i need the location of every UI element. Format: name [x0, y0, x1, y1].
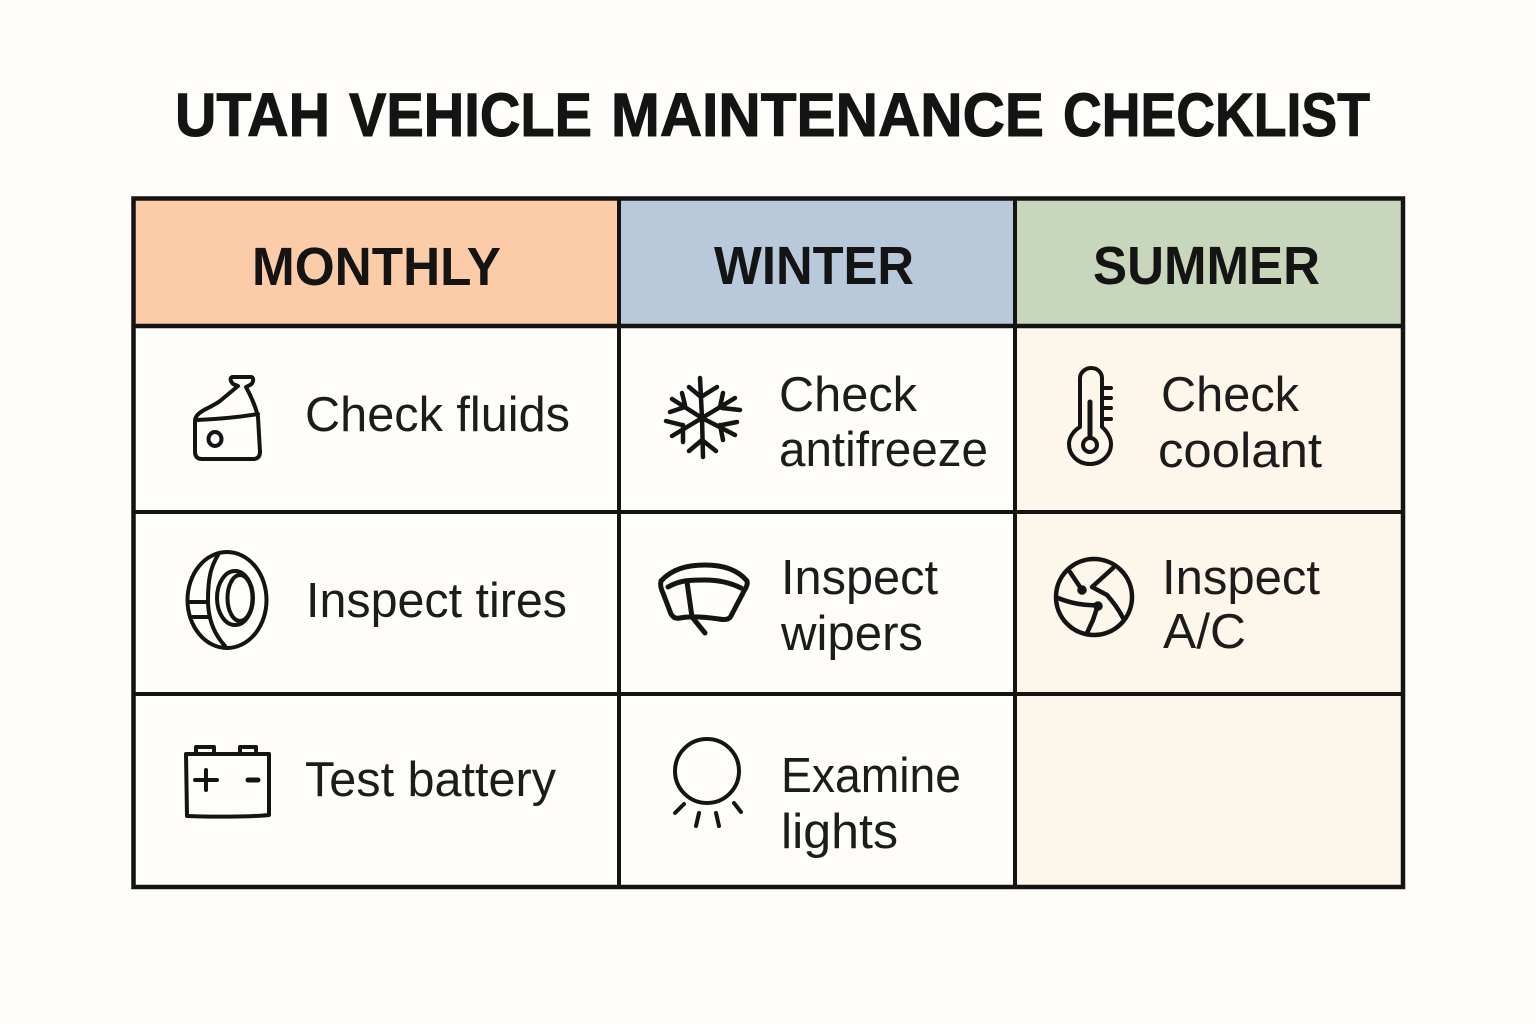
- text: examine lights: Examine: [781, 749, 961, 803]
- title: UTAH: [175, 81, 330, 149]
- icon: a/c fan: [1056, 559, 1132, 635]
- row: check antifreeze: antifreeze: [779, 423, 988, 477]
- panel: summer column background: [1015, 326, 1403, 887]
- title: MAINTENANCE: [611, 81, 1044, 149]
- row: inspect wipers: [661, 551, 938, 661]
- row: check coolant: coolant: [1158, 424, 1322, 478]
- panel: summer header: [1015, 199, 1403, 326]
- text: check coolant: Check: [1161, 368, 1299, 422]
- text: inspect a/c: Inspect: [1162, 551, 1320, 605]
- text: inspect wipers: Inspect: [781, 551, 938, 605]
- text: inspect tires: Inspect tires: [306, 574, 567, 628]
- row: inspect wipers: wipers: [780, 607, 923, 661]
- title: VEHICLE: [349, 81, 592, 149]
- panel: monthly header: [134, 199, 619, 326]
- text: check antifreeze: Check: [779, 368, 917, 422]
- row: examine lights: [675, 739, 961, 859]
- text: test battery: Test battery: [305, 753, 556, 807]
- icon: fluid bottle: [195, 377, 260, 459]
- icon: wiper windshield: [661, 565, 747, 633]
- icon: thermometer: [1069, 368, 1111, 464]
- icon: snowflake: [666, 378, 740, 457]
- panel: winter header: [619, 199, 1015, 326]
- row: inspect a/c: A/C: [1163, 605, 1246, 659]
- table grid lines: [134, 198, 1403, 887]
- icon: battery: [186, 747, 269, 817]
- row: check antifreeze: [666, 368, 988, 477]
- row: check coolant: [1069, 368, 1322, 478]
- row: check fluids: [195, 377, 570, 459]
- title: [175, 81, 1370, 149]
- heading: monthly: MONTHLY: [252, 237, 501, 297]
- row: examine lights: lights: [781, 805, 898, 859]
- checklist table: [134, 198, 1403, 887]
- title: CHECKLIST: [1063, 81, 1370, 149]
- row: test battery: [186, 747, 556, 817]
- row: inspect a/c: [1056, 551, 1320, 659]
- heading: summer: SUMMER: [1093, 236, 1320, 296]
- text: check fluids: Check fluids: [305, 388, 570, 442]
- icon: tire: [188, 552, 266, 648]
- icon: light: [675, 739, 741, 826]
- row: inspect tires: [188, 552, 567, 648]
- heading: winter: WINTER: [714, 236, 914, 296]
